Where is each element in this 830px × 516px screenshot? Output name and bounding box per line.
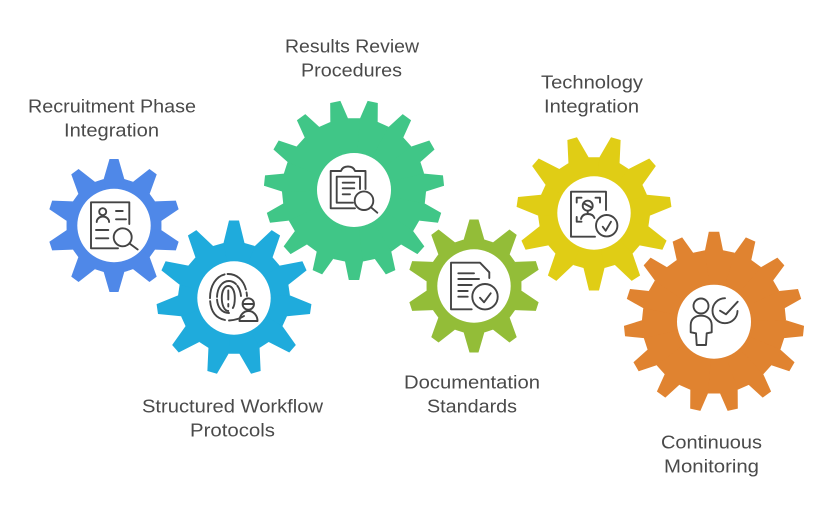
label: Documentation Standards [404,373,540,417]
icon: person with check [691,298,738,345]
label: Recruitment Phase Integration [28,97,196,141]
gear: Results Review Procedures [262,98,446,281]
label: Continuous Monitoring [661,433,762,477]
icon: face scan with check [571,192,617,237]
label: Results Review Procedures: Procedures [301,61,402,81]
label: Structured Workflow Protocols: Structured Workflow [142,397,324,417]
icon: resume with magnifier [91,202,138,250]
label: Documentation Standards: Standards [427,397,517,417]
sky blue gear body [154,220,313,378]
label: Documentation Standards: Documentation [404,373,540,393]
label: Continuous Monitoring: Monitoring [664,457,759,477]
label: Results Review Procedures: Results Review [285,37,420,57]
label: Structured Workflow Protocols: Protocols [190,421,275,441]
label: Technology Integration [541,73,643,117]
gear: Documentation Standards [405,220,543,352]
lime gear body [405,220,543,352]
icon: document with check [451,263,498,309]
green gear body [262,98,446,281]
label: Results Review Procedures [285,37,420,81]
label: Continuous Monitoring: Continuous [661,433,762,453]
gear: Structured Workflow Protocols [154,220,313,378]
label: Technology Integration: Technology [541,73,643,93]
gear: Continuous Monitoring [622,231,806,414]
gear: Technology Integration [515,133,674,290]
label: Structured Workflow Protocols [142,397,324,441]
label: Technology Integration: Integration [544,97,639,117]
blue gear body [45,159,183,292]
label: Recruitment Phase Integration: Integration [64,121,159,141]
label: Recruitment Phase Integration: Recruitment Phase [28,97,196,117]
icon: clipboard with magnifier [331,166,377,213]
yellow gear body [515,133,674,290]
gear: Recruitment Phase Integration [45,159,183,292]
icon: fingerprint with person [210,274,258,321]
orange gear body [622,231,806,414]
